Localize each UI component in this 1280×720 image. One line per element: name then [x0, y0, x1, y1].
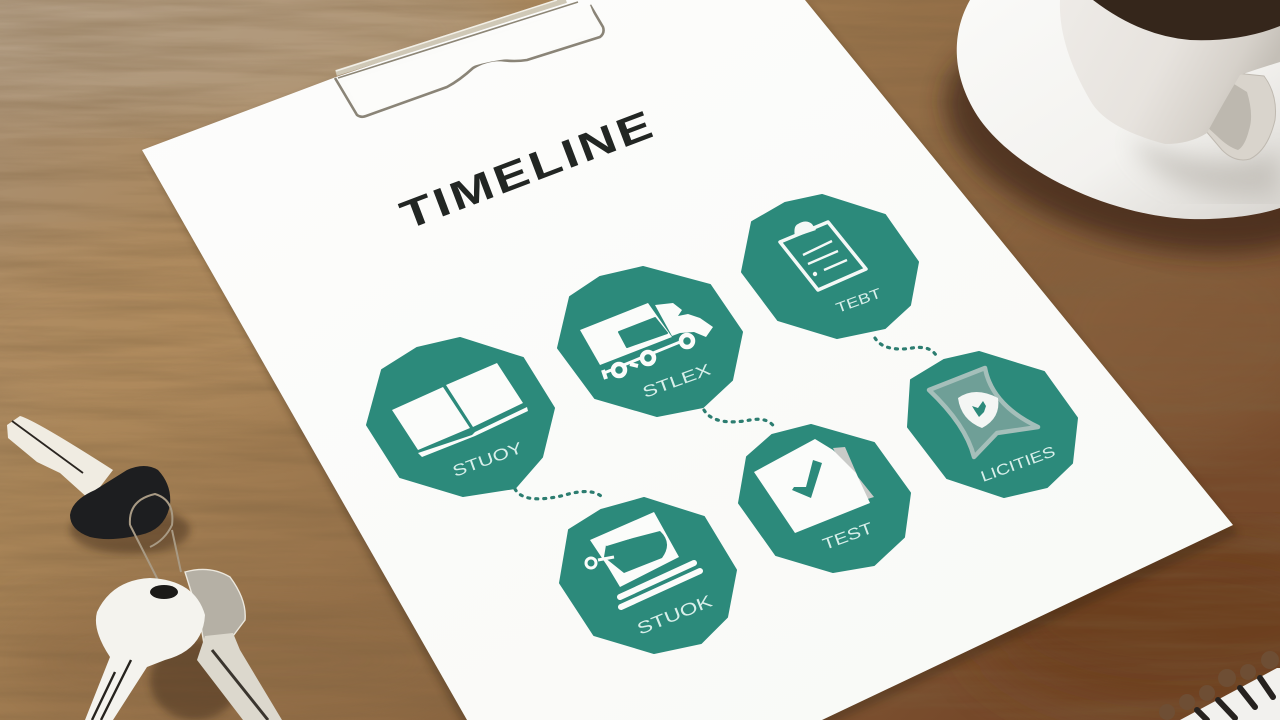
cup saucer shadow [921, 0, 1280, 293]
icon: clipboard [780, 222, 866, 290]
connector: study to stuok [515, 489, 603, 499]
label: stuok: STUOK [634, 591, 716, 639]
connector: truck to test [704, 410, 775, 428]
icon: truck [580, 303, 713, 379]
badge: test [739, 425, 910, 572]
badge: truck [558, 267, 742, 416]
label: licenses: LICITIES [979, 443, 1058, 486]
badge: study [367, 338, 554, 496]
icon: open book [392, 363, 528, 457]
label: study: STUOY [451, 440, 525, 481]
icon: checked paper [754, 439, 874, 533]
icon: device with lines [586, 512, 700, 607]
badge: stuok [560, 498, 736, 653]
badge: licenses [908, 352, 1077, 497]
badge: clipboard [742, 195, 918, 338]
label: test: TEST [821, 520, 876, 554]
label: truck: STLEX [641, 361, 714, 402]
coffee [1093, 0, 1280, 40]
icon: shield banner [929, 368, 1038, 457]
label: clipboard: TEBT [834, 285, 884, 316]
title: TIMELINE [394, 101, 661, 238]
connector: clipboard to licenses [875, 338, 937, 357]
metal clipboard clip [335, 0, 604, 117]
saucer [957, 0, 1280, 219]
keys [7, 416, 282, 720]
cup body [1060, 0, 1280, 144]
key: white head [85, 578, 205, 720]
key: grey head [185, 569, 282, 720]
cup handle [1205, 72, 1276, 160]
coffee cup and saucer [957, 0, 1280, 219]
key: dark head [7, 416, 170, 539]
notebook corner with spiral [1159, 651, 1280, 720]
key ring [130, 494, 181, 590]
